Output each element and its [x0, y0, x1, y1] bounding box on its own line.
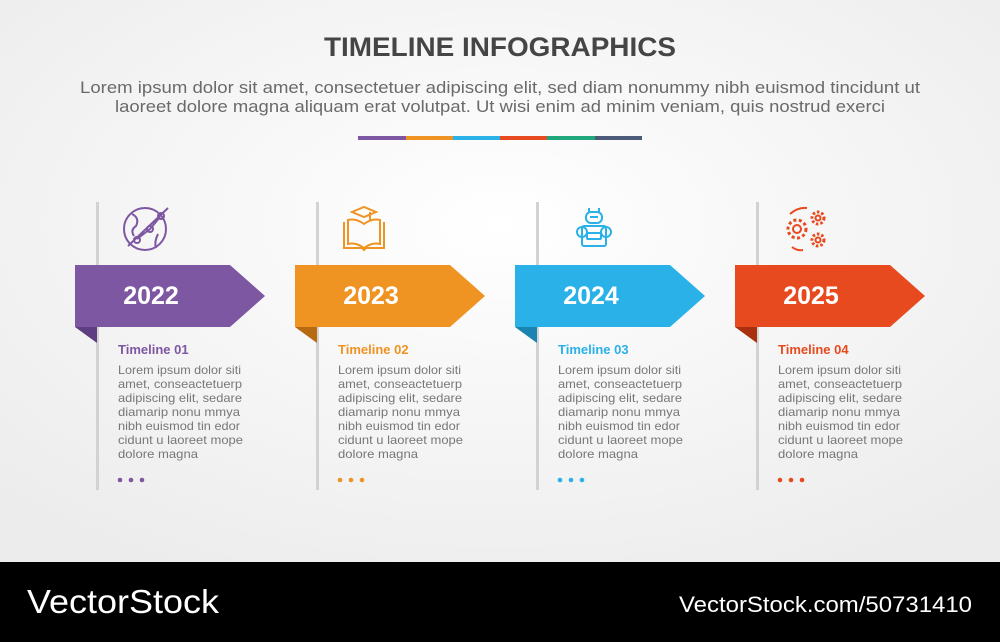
text block 03: diamarip nonu mmya — [558, 405, 680, 419]
text block 02: diamarip nonu mmya — [338, 405, 460, 419]
text block 03: cidunt u laoreet mope — [558, 433, 683, 447]
panel: 2024 — [515, 202, 705, 490]
text block 04: Lorem ipsum dolor siti — [778, 363, 901, 377]
icon: globe — [124, 208, 168, 250]
text block 04: cidunt u laoreet mope — [778, 433, 903, 447]
text block 03: amet, conseactetuerp — [558, 377, 682, 391]
text block 03 — [558, 342, 683, 482]
icon: robot — [577, 208, 611, 246]
text block 01: Timeline 01 — [118, 342, 189, 357]
text block 02: cidunt u laoreet mope — [338, 433, 463, 447]
text block 02: dolore magna — [338, 447, 418, 461]
text block 03: Lorem ipsum dolor siti — [558, 363, 681, 377]
text block 01: nibh euismod tin edor — [118, 419, 240, 433]
panel: 2022 — [75, 202, 265, 490]
text block 02: nibh euismod tin edor — [338, 419, 460, 433]
text block 01 — [118, 342, 243, 482]
text block 01: cidunt u laoreet mope — [118, 433, 243, 447]
subtitle: laoreet dolore magna aliquam erat volutpat. Ut wisi enim ad minim veniam, quis nostrud exerci — [115, 98, 885, 116]
text block 01: diamarip nonu mmya — [118, 405, 240, 419]
ribbon 2025: 2025 — [783, 282, 839, 310]
text block 04: Timeline 04 — [778, 342, 849, 357]
ribbon 2024 — [515, 265, 705, 343]
subtitle: Lorem ipsum dolor sit amet, consectetuer adipiscing elit, sed diam nonummy nibh euismod tincidunt ut — [80, 79, 920, 97]
text block 02: amet, conseactetuerp — [338, 377, 462, 391]
text block 03: adipiscing elit, sedare — [558, 391, 682, 405]
title: TIMELINE INFOGRAPHICS — [324, 32, 676, 62]
text block 03: nibh euismod tin edor — [558, 419, 680, 433]
color bar divider — [358, 136, 642, 140]
text block 04 — [778, 342, 903, 482]
subtitle — [80, 79, 920, 116]
ribbon 2023 — [295, 265, 485, 343]
panel: 2023 — [295, 202, 485, 490]
text block 02 — [338, 342, 463, 482]
ribbon 2023: 2023 — [343, 282, 399, 310]
ribbon 2024: 2024 — [563, 282, 619, 310]
text block 01: Lorem ipsum dolor siti — [118, 363, 241, 377]
panel: 2025 — [735, 202, 925, 490]
text block 02: Timeline 02 — [338, 342, 409, 357]
icon: gears — [788, 208, 824, 250]
ribbon 2022 — [75, 265, 265, 343]
footer bar — [0, 562, 1000, 642]
footer bar: VectorStock — [27, 583, 220, 620]
text block 02: Lorem ipsum dolor siti — [338, 363, 461, 377]
text block 04: nibh euismod tin edor — [778, 419, 900, 433]
text block 04: adipiscing elit, sedare — [778, 391, 902, 405]
ribbon 2025 — [735, 265, 925, 343]
text block 01: amet, conseactetuerp — [118, 377, 242, 391]
text block 04: diamarip nonu mmya — [778, 405, 900, 419]
text block 03: dolore magna — [558, 447, 638, 461]
icon: book — [344, 207, 384, 250]
text block 03: Timeline 03 — [558, 342, 629, 357]
ribbon 2022: 2022 — [123, 282, 179, 310]
text block 02: adipiscing elit, sedare — [338, 391, 462, 405]
text block 01: dolore magna — [118, 447, 198, 461]
text block 04: dolore magna — [778, 447, 858, 461]
text block 04: amet, conseactetuerp — [778, 377, 902, 391]
text block 01: adipiscing elit, sedare — [118, 391, 242, 405]
footer bar: VectorStock.com/50731410 — [679, 592, 972, 617]
